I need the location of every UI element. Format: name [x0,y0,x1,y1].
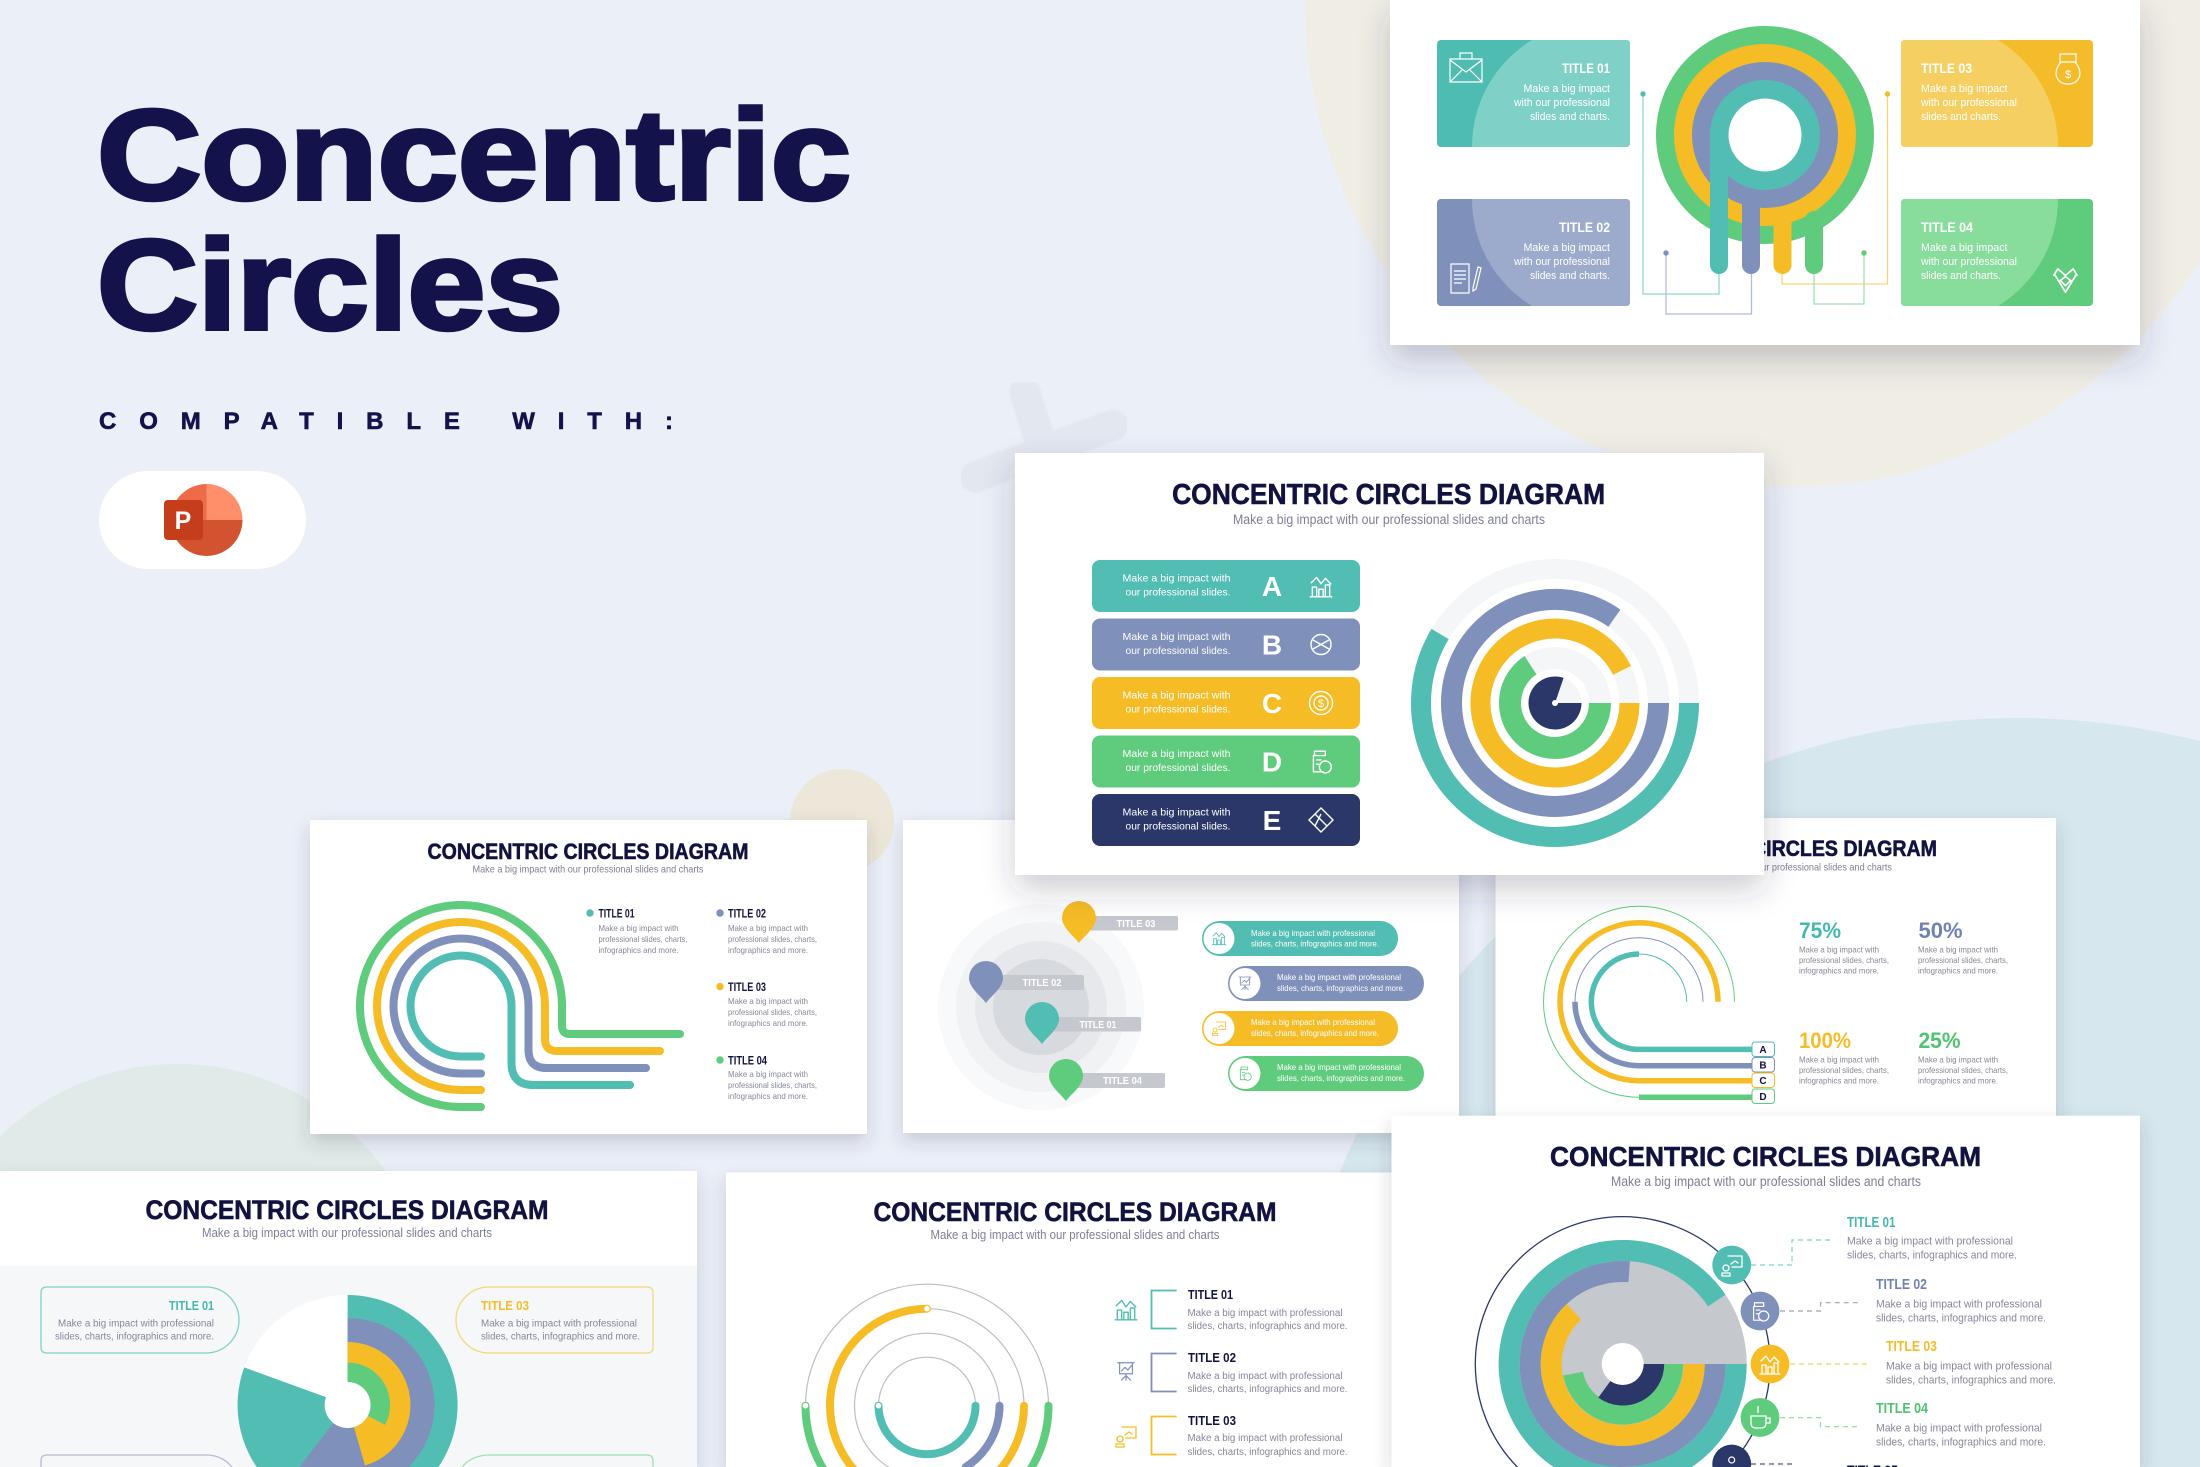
icon: document and pen [1451,264,1481,293]
legend: title 02: professional slides, charts, [728,934,817,944]
icon node: navy [1712,1445,1751,1467]
row: E: our professional slides. [1126,820,1230,832]
slide heading: CONCENTRIC CIRCLES DIAGRAM [1550,1141,1981,1172]
item: title 03: slides, charts, infographics and more. [1188,1447,1348,1458]
slide heading: CONCENTRIC CIRCLES DIAGRAM [874,1197,1276,1227]
dashed connectors [1751,1240,1870,1464]
panel: percentages slide [1496,818,2056,1138]
stat: 100%: infographics and more. [1799,1076,1879,1086]
text: title 01: slides, charts, infographics and more. [1847,1250,2017,1262]
stat: 75% [1799,918,1889,976]
legend: title 01: infographics and more. [598,945,678,955]
callout: title 01 [41,1287,239,1353]
row: C: our professional slides. [1126,704,1230,716]
legend: title 03 [716,980,817,1028]
title: Concentric Circles: Circles [97,214,563,357]
callout: title 01: Make a big impact with professional [58,1318,214,1330]
card: title 02: slides and charts. [1530,270,1610,282]
pill: blue: Make a big impact with professional [1277,972,1401,982]
stat: 75%: 75% [1799,918,1841,943]
pill: yellow: slides, charts, infographics and more. [1251,1028,1379,1038]
icon node: green [1741,1398,1779,1437]
pin: title 03 [1062,901,1178,943]
pin: title 03: TITLE 03 [1116,918,1156,930]
text: title 04 [1876,1401,2046,1448]
label: A [1752,1042,1774,1056]
pill: green: Make a big impact with professional [1277,1062,1401,1072]
label: A: A [1759,1045,1767,1056]
slide heading: CONCENTRIC CIRCLES DIAGRAM [146,1195,548,1225]
legend: title 04: Make a big impact with [728,1069,808,1079]
chart: grey concentric rings [938,904,1144,1110]
panel: map pins slide [903,820,1459,1133]
pill: teal: slides, charts, infographics and more. [1251,938,1379,948]
icon: coin [1310,692,1332,714]
pill: yellow [1202,1011,1398,1046]
row: B: B [1262,630,1282,660]
label: D [1752,1089,1774,1104]
icon: hands [1311,634,1331,654]
card: title 04 [1901,199,2093,306]
chart: spiral donut [1421,569,1689,837]
label: D: D [1759,1092,1767,1103]
slide subtitle: Make a big impact with our professional slides and charts [1611,1174,1921,1189]
pin: title 01 [1025,1002,1141,1044]
item: title 02: Make a big impact with professional [1188,1371,1342,1382]
legend: title 01: TITLE 01 [598,906,635,920]
legend: title 04: TITLE 04 [728,1054,767,1068]
pin: title 04: TITLE 04 [1103,1075,1142,1087]
chart: progress arcs [1544,906,1752,1097]
panel: rainbow arches slide [310,820,867,1134]
text: title 02 [1876,1277,2046,1324]
legend: title 01: professional slides, charts, [598,934,688,944]
pin: title 02 [969,961,1084,1003]
stat: 50% [1918,918,2008,976]
stat: 100% [1799,1028,1889,1086]
slide subtitle: Make a big impact with our professional slides and charts [202,1226,492,1240]
legend: title 03: infographics and more. [728,1018,808,1028]
label: B [1752,1058,1774,1072]
callout: title 03: Make a big impact with professional [481,1318,637,1330]
icon: money bag: $ [2065,69,2071,81]
legend: title 01 [586,906,688,955]
legend: title 03: Make a big impact with [728,996,808,1006]
item: title 01 [1115,1287,1348,1332]
icon: handshake [2054,269,2077,292]
chart: wedge donut [238,1295,458,1467]
item: title 02 [1118,1350,1348,1395]
pill: blue: slides, charts, infographics and more. [1277,983,1405,993]
row: A: Make a big impact with [1122,572,1231,584]
stat: 75%: professional slides, charts, [1799,955,1889,965]
legend: title 04 [716,1054,817,1101]
card: title 04: Make a big impact [1921,242,2008,254]
stat: 75%: Make a big impact with [1799,944,1879,954]
stat: 100%: 100% [1799,1028,1851,1053]
item: title 03: Make a big impact with professional [1188,1433,1342,1444]
callout: title 01: TITLE 01 [169,1298,214,1313]
label: C [1752,1073,1774,1088]
chart: radial segments [1475,1217,1770,1467]
slide subtitle: Make a big impact with our professional slides and charts [930,1228,1220,1242]
row: E: E [1263,805,1281,836]
item: title 02: TITLE 02 [1188,1350,1236,1365]
pill: teal: Make a big impact with professional [1251,928,1375,938]
legend: title 01: Make a big impact with [598,923,679,933]
legend: title 04: professional slides, charts, [728,1080,817,1090]
icon: briefcase [1450,53,1482,82]
stat: 25%: Make a big impact with [1918,1054,1998,1064]
title: Concentric Circles: Concentric [97,84,851,227]
stat: 50%: professional slides, charts, [1918,955,2008,965]
callout: title 01: slides, charts, infographics and more. [55,1332,214,1342]
row: E: Make a big impact with [1122,806,1231,818]
item: title 02: slides, charts, infographics and more. [1188,1384,1348,1395]
callout: title 03: TITLE 03 [481,1298,529,1313]
icon: puzzle diamond [1309,808,1333,832]
card: title 01: with our professional [1513,97,1610,109]
pin: title 01: TITLE 01 [1080,1019,1117,1031]
item: title 03 [1116,1413,1348,1458]
title: Concentric Circles [97,84,851,357]
row: A: A [1262,571,1282,602]
stat: 100%: Make a big impact with [1799,1054,1879,1064]
stat: 25% [1918,1028,2008,1086]
card: title 02 [1437,199,1630,306]
card: title 03: slides and charts. [1921,111,2001,123]
card: title 01 [1437,40,1630,147]
pill: teal [1202,921,1398,956]
badge: PowerPoint [99,471,306,569]
item: title 01: slides, charts, infographics and more. [1188,1321,1348,1332]
chart: P-shaped concentric rings [1656,26,1874,265]
row: C: Make a big impact with [1122,690,1231,702]
icon node: yellow [1751,1345,1789,1383]
card: title 03: Make a big impact [1921,83,2008,95]
panel: wedge donut slide [0,1171,697,1467]
row: A: our professional slides. [1126,586,1230,598]
pill: green [1228,1056,1424,1091]
callout: lower right outline [462,1455,653,1467]
text: title 03: slides, charts, infographics and more. [1886,1374,2056,1386]
legend: title 02 [716,906,817,955]
item: title 01: TITLE 01 [1188,1287,1233,1302]
chart: rainbow arches [360,905,680,1107]
card: title 04: with our professional [1920,256,2017,268]
stat: 100%: professional slides, charts, [1799,1065,1889,1075]
slide heading: CONCENTRIC CIRCLES DIAGRAM [1172,479,1605,511]
text: title 04: TITLE 04 [1876,1401,1928,1417]
text: title 03: Make a big impact with professional [1886,1360,2052,1372]
stat: 25%: infographics and more. [1918,1076,1998,1086]
panel: top P-shaped rings slide [1390,0,2140,345]
slide subtitle: Make a big impact with our professional slides and charts [1661,862,1892,874]
row: C: C [1262,688,1282,719]
row: B [1092,618,1360,670]
badge: PowerPoint: P [175,507,191,535]
stat: 50%: Make a big impact with [1918,944,1998,954]
legend: title 03: TITLE 03 [728,980,766,994]
pill: blue [1228,966,1424,1001]
callout: title 03 [456,1287,653,1353]
row: C [1092,677,1360,729]
card: title 02: TITLE 02 [1559,220,1610,235]
icon: coin: $ [1318,698,1324,710]
icon node: blue [1741,1292,1779,1330]
panel: radial segments slide [1392,1116,2140,1467]
card: title 04: TITLE 04 [1921,220,1973,235]
text: title 04: slides, charts, infographics and more. [1876,1436,2046,1448]
item: title 01: Make a big impact with professional [1188,1308,1342,1319]
row: B: our professional slides. [1126,645,1230,657]
slide subtitle: Make a big impact with our professional slides and charts [472,864,704,876]
card: title 02: with our professional [1513,256,1610,268]
row: D: D [1262,746,1282,778]
stat: 50%: infographics and more. [1918,966,1998,976]
icon: money bag [2056,54,2080,84]
legend: title 03: professional slides, charts, [728,1007,817,1017]
row: B: Make a big impact with [1122,631,1231,643]
callout: title 03: slides, charts, infographics and more. [481,1332,640,1342]
stat: 25%: professional slides, charts, [1918,1065,2008,1075]
stat: 50%: 50% [1918,918,1962,943]
panel: half rings slide [726,1172,1406,1467]
heading: compatible with: COMPATIBLE WITH: [99,408,673,435]
slide heading: CONCENTRIC CIRCLES DIAGRAM [1616,836,1937,861]
card: title 04: slides and charts. [1921,270,2001,282]
text: title 02: TITLE 02 [1876,1277,1927,1293]
card: title 01: TITLE 01 [1562,61,1610,76]
card: title 03 [1901,40,2093,147]
row: D [1092,736,1360,788]
chart: half rings [803,1284,1048,1467]
pin: title 02: TITLE 02 [1022,977,1062,989]
text: title 04: Make a big impact with professional [1876,1422,2042,1434]
row: E [1092,794,1360,846]
stat: 75%: infographics and more. [1799,966,1879,976]
text: title 03 [1886,1339,2056,1386]
legend: title 04: infographics and more. [728,1091,808,1101]
row: A [1092,560,1360,612]
text: title 02: slides, charts, infographics and more. [1876,1312,2046,1324]
card: title 01: Make a big impact [1524,83,1610,95]
legend: title 02: Make a big impact with [728,923,808,933]
text: title 01 [1847,1215,2017,1262]
text: title 01: Make a big impact with professional [1847,1236,2013,1248]
pin: title 04 [1049,1059,1165,1101]
panel: A to E spiral slide [1015,453,1764,875]
slide subtitle: Make a big impact with our professional slides and charts [1233,512,1545,527]
card: title 02: Make a big impact [1524,242,1610,254]
row: D: Make a big impact with [1122,748,1231,760]
text: title 03: TITLE 03 [1886,1339,1937,1355]
text: title 01: TITLE 01 [1847,1215,1896,1231]
slide heading: CONCENTRIC CIRCLES DIAGRAM [428,839,748,864]
text: title 02: Make a big impact with professional [1876,1298,2042,1310]
item: title 03: TITLE 03 [1188,1413,1236,1428]
pill: yellow: Make a big impact with professional [1251,1017,1375,1027]
legend: title 02: infographics and more. [728,945,808,955]
card: title 03: with our professional [1920,97,2017,109]
card: title 01: slides and charts. [1530,111,1610,123]
connector lines [1640,91,1890,314]
label: C: C [1759,1076,1767,1087]
card: title 03: TITLE 03 [1921,61,1972,76]
pill: green: slides, charts, infographics and more. [1277,1073,1405,1083]
icon node: teal [1712,1246,1751,1284]
label: B: B [1759,1060,1767,1072]
legend: title 02: TITLE 02 [728,906,766,920]
stat: 25%: 25% [1918,1028,1960,1053]
callout: lower left outline [41,1455,232,1467]
row: D: our professional slides. [1126,762,1230,774]
